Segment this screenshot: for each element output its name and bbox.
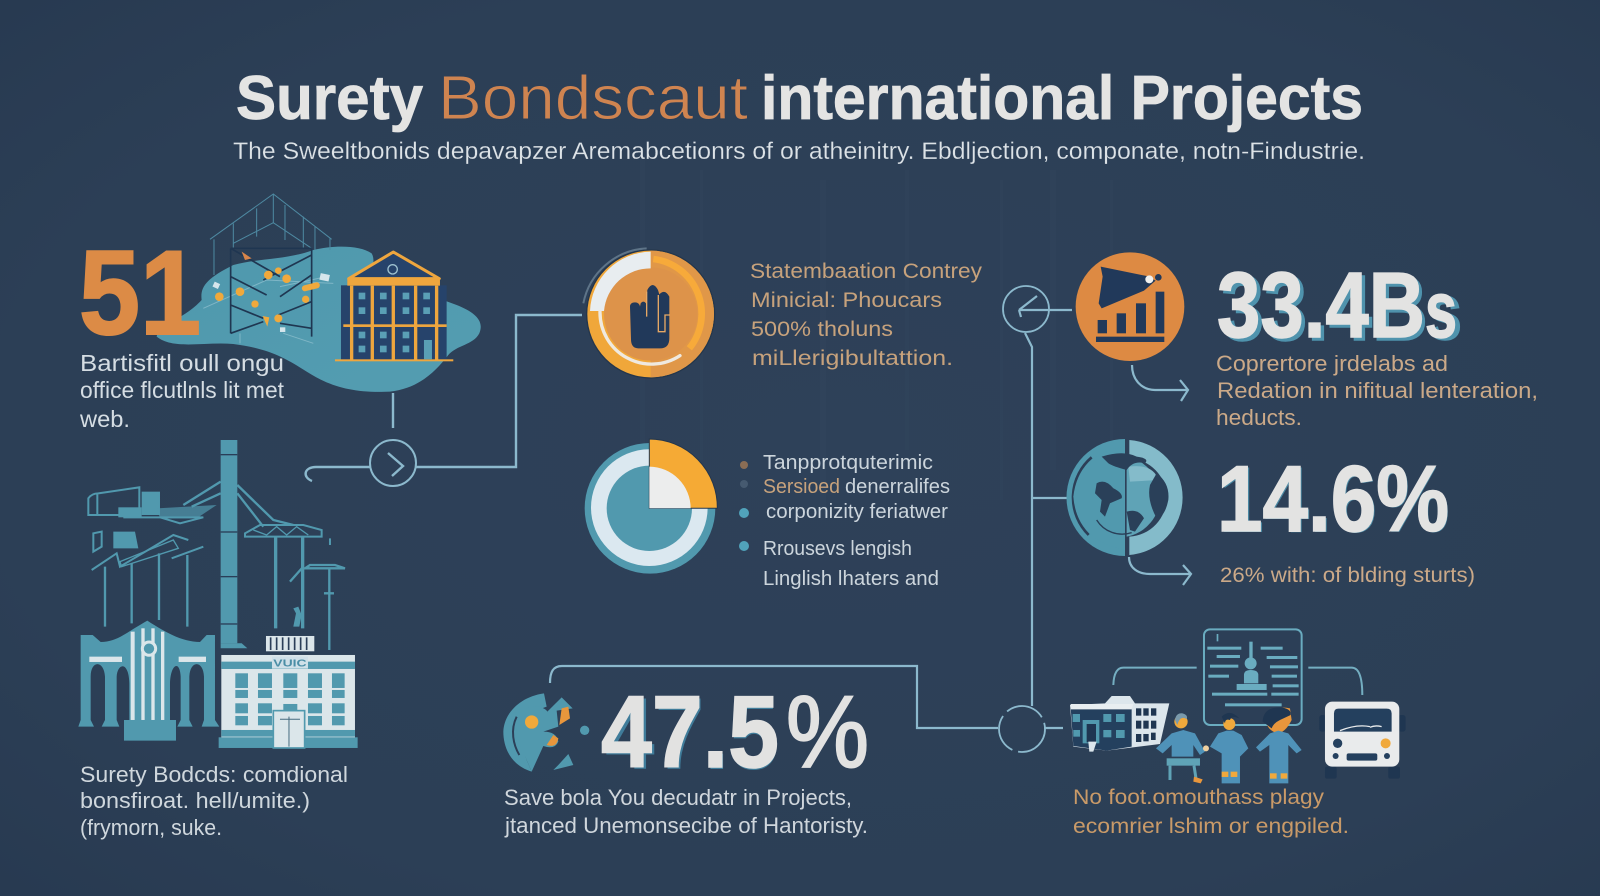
- connector: right trunk line: [550, 286, 1191, 752]
- office building: [219, 636, 358, 748]
- office building: VUIC: [273, 658, 307, 669]
- title: Surety: [236, 64, 423, 133]
- left gantry cranes: [88, 487, 203, 627]
- van: [1319, 702, 1406, 779]
- dark scaffold: [231, 248, 312, 337]
- stat: 14.6%: 14.6%: [1217, 446, 1449, 551]
- text: bottom right description: No foot.omouthass plagy: [1073, 785, 1324, 809]
- text: 47.5% description: [504, 785, 868, 838]
- text: 33.4Bs description: heducts.: [1216, 405, 1302, 430]
- text: 47.5% description: jtanced Unemonsecibe of Hantoristy.: [504, 813, 868, 838]
- illustration: document, building, people, van: [1070, 629, 1406, 783]
- text: 33.4Bs description: Coprertore jrdelabs ad: [1216, 351, 1448, 376]
- list: bullet items: corponizity feriatwer: [766, 501, 948, 523]
- classical building: [335, 252, 453, 361]
- illustration: infrastructure: [78, 440, 358, 748]
- text: 51 description: web.: [79, 406, 130, 432]
- icons: center circles: [583, 248, 717, 574]
- title: international Projects: [761, 64, 1363, 133]
- text: statement block: 500% tholuns: [751, 317, 893, 341]
- icons: right circles: [1066, 252, 1184, 556]
- stat: 51: 51: [79, 226, 201, 360]
- list: bullet items: Tanpprotquterimic: [763, 452, 933, 474]
- text: 14.6% description: 26% with: of blding sturts): [1220, 564, 1475, 587]
- stat: 47.5%: %: [786, 675, 869, 789]
- list: bullet items: denerralifes: [845, 476, 950, 498]
- title: Bondscaut: [438, 64, 748, 133]
- text: surety bonds description: bonsfiroat. hell/umite.): [80, 788, 310, 813]
- teal blob: [157, 247, 481, 392]
- stat: 33.4Bs: s: [1425, 265, 1457, 354]
- tower and cables: [183, 440, 293, 648]
- text: bottom right description: [1073, 785, 1349, 838]
- text: statement block: [750, 259, 982, 370]
- right pylons: [245, 525, 345, 650]
- list: bullet items: Rrousevs lengish: [763, 538, 912, 560]
- text: surety bonds description: [80, 762, 348, 840]
- icon: donut chart: [585, 439, 717, 574]
- text: statement block: miLlerigibultattion.: [752, 346, 953, 370]
- document: [1204, 629, 1302, 725]
- people: [1156, 707, 1302, 783]
- list: bullet items: Linglish lhaters and: [763, 568, 939, 590]
- list: bullet items: [739, 452, 950, 590]
- stat: 33.4Bs: 33.4B: [1217, 253, 1425, 357]
- text: surety bonds description: (frymorn, suke.: [80, 815, 222, 840]
- text: surety bonds description: Surety Bodcds: comdional: [80, 762, 348, 787]
- subtitle: The Sweeltbonids depavapzer Aremabcetionrs of or atheinitry. Ebdljection, componate, notn-Findustrie.: [233, 138, 1365, 165]
- icon: globe: [1066, 439, 1183, 556]
- connectors: [1113, 668, 1362, 695]
- wire roof frame: [203, 194, 333, 343]
- text: 51 description: Bartisfitl oull ongu: [80, 350, 284, 376]
- list: bullet items: Sersioed: [763, 476, 840, 498]
- stat: 47.5%: 47.5: [601, 675, 779, 789]
- icon: hand gauge: [583, 248, 715, 379]
- text: bottom right description: ecomrier lshim or engpiled.: [1073, 814, 1349, 838]
- title: [236, 64, 1363, 133]
- text: 33.4Bs description: [1216, 351, 1538, 430]
- connector: blob to left node and top circle: [306, 315, 582, 486]
- stat: 33.4Bs: 33.4B: [1221, 256, 1428, 360]
- text: 47.5% description: Save bola You decudatr in Projects,: [504, 785, 852, 810]
- small building: [1070, 696, 1169, 752]
- text: 51 description: [79, 350, 284, 432]
- text: 33.4Bs description: Redation in nifitual lenteration,: [1217, 378, 1538, 403]
- stat: 33.4Bs: s: [1428, 267, 1462, 356]
- stat: 47.5%: 47.5: [605, 677, 779, 791]
- illustration: scaffold and building on teal blob: [157, 194, 481, 392]
- text: statement block: Minicial: Phoucars: [751, 288, 942, 312]
- icon: partial ring with dots: [503, 693, 589, 772]
- icon: growth chart: [1076, 252, 1184, 361]
- text: 51 description: office flcutlnls lit met: [80, 377, 284, 403]
- orange joints: [215, 252, 320, 327]
- arched gate: [78, 621, 219, 741]
- text: statement block: Statembaation Contrey: [750, 259, 982, 283]
- stat: 14.6%: 14.6%: [1219, 447, 1450, 552]
